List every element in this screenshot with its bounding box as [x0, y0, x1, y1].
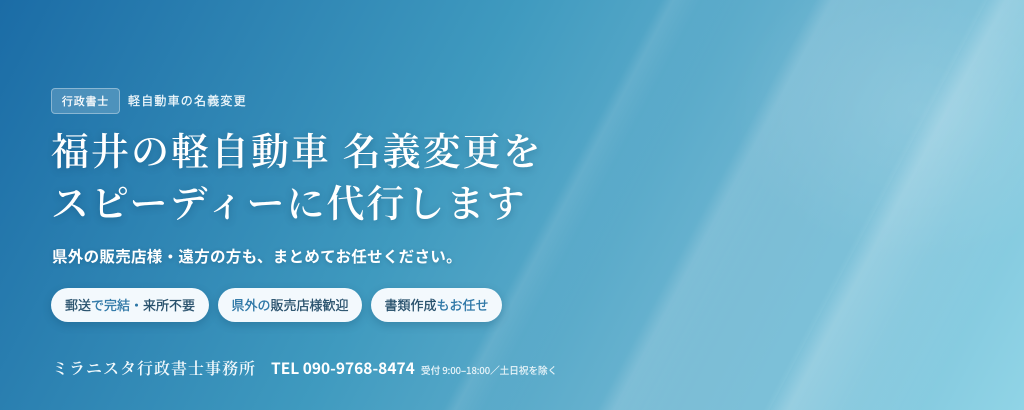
badge: 行政書士 [51, 88, 120, 114]
subheading: 県外の販売店様・遠方の方も、まとめてお任せください。 [52, 245, 462, 267]
badge: 行政書士: 行政書士 [62, 93, 109, 109]
title: 福井の軽自動車 名義変更を [51, 121, 543, 176]
business hours: 受付 9:00–18:00／土日祝を除く [421, 363, 557, 377]
chip: 郵送で完結: 郵送で完結・来所不要 [65, 295, 195, 314]
telephone: TEL 090-9768-8474 [271, 357, 415, 379]
office name: ミラニスタ行政書士事務所 [52, 356, 256, 379]
chip: 県外の販売店様歓迎 [218, 288, 362, 322]
chip: 書類作成もお任せ: 書類作成もお任せ [384, 295, 489, 314]
chip: 郵送で完結 [51, 288, 209, 322]
chip: 書類作成もお任せ [371, 288, 502, 322]
eyebrow text: 軽自動車の名義変更 [128, 92, 247, 109]
title [51, 121, 543, 228]
title: スピーディーに代行します [51, 173, 526, 228]
chip: 県外の販売店様歓迎: 県外の販売店様歓迎 [231, 295, 349, 314]
